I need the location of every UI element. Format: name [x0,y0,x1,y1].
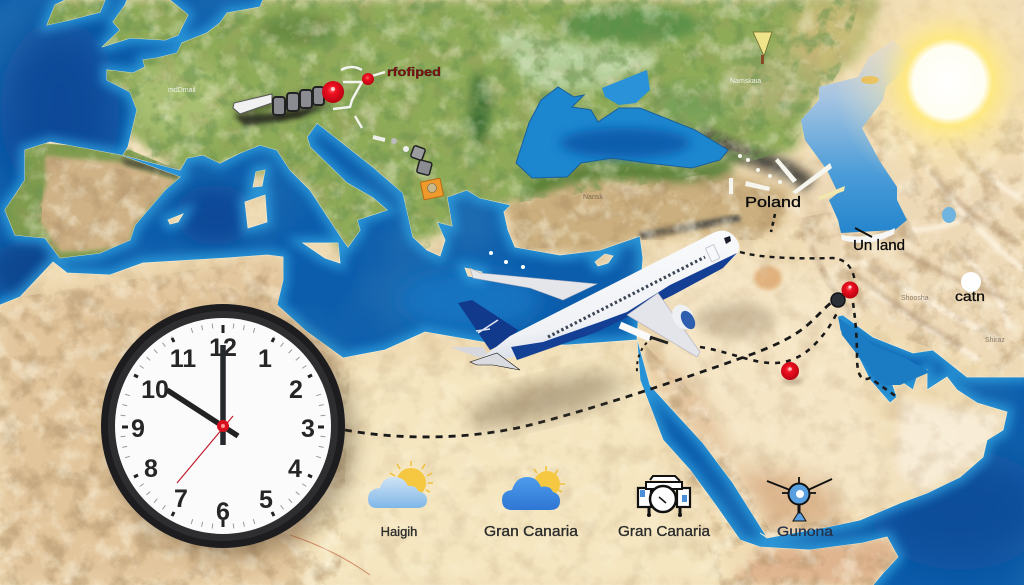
icon: satellite antenna [767,477,832,521]
clock numerals: 10 [141,376,169,404]
label: Gran Canaria first: Gran Canaria [484,523,579,540]
clock numerals: 5 [259,486,273,514]
icon: red map pin small [362,73,374,85]
label: Un land: Un land [853,237,905,254]
route hub marker [831,293,845,307]
small faint map place labels: Shoosha [901,295,929,302]
label: red place name: rfofiped [387,65,441,79]
icon: truck chain and orange marker, Balkans [373,137,444,200]
clock numerals: 2 [289,376,303,404]
clock numerals: 6 [216,498,230,526]
small faint map place labels: mdDmail [168,87,196,94]
label: Haigih: Haigih [381,524,417,539]
label: Poland: Poland [745,194,801,211]
inland seas: Black Sea, Azov, Caspian [516,40,956,385]
icon: airliner [450,231,739,370]
aircraft shadow [463,363,627,437]
label: Gran Canaria second: Gran Canaria [618,523,711,540]
clock hands [167,345,238,483]
clock hour marks [122,325,324,527]
clock numerals: 1 [258,345,272,373]
icon: truck convoy with pin, Europe [233,87,324,126]
icon: sun behind light cloud [368,461,433,508]
white dots trail, Aegean [489,251,525,269]
clock numerals: 8 [144,455,158,483]
icon: sun behind blue cloud [502,466,565,510]
label: Gunona: Gunona [777,523,833,539]
small faint map place labels: Shiraz [985,337,1005,344]
route: flight paths dashed [345,214,897,437]
clock numerals: 12 [209,334,237,362]
small white aircraft group near Poland label [729,154,845,200]
icon: instrument panel with gauge [638,476,690,517]
small faint map place labels: Namskaia [730,78,761,85]
label: catn with white marker [955,272,985,304]
clock numerals: 3 [301,415,315,443]
icon: yellow kite marker [753,32,772,64]
icon: wall clock [101,304,356,558]
route: white trail around Alps [333,67,385,128]
small faint map place labels: Nansk [583,194,603,201]
icon: red map pin large [322,81,344,103]
clock numerals: 7 [174,485,188,513]
icon: white airplane on Caspian [841,228,895,243]
icon: red map pin east [842,282,858,298]
clock numerals: 11 [170,345,196,373]
icon: red map pin south [781,362,803,385]
clock numerals: 9 [131,415,145,443]
clock numerals: 4 [288,455,302,483]
small faint map place labels [168,78,1005,344]
clock numerals [131,334,315,526]
clock tick marks [121,324,325,528]
label: catn with white marker: catn [955,288,985,304]
sun [834,0,1024,197]
